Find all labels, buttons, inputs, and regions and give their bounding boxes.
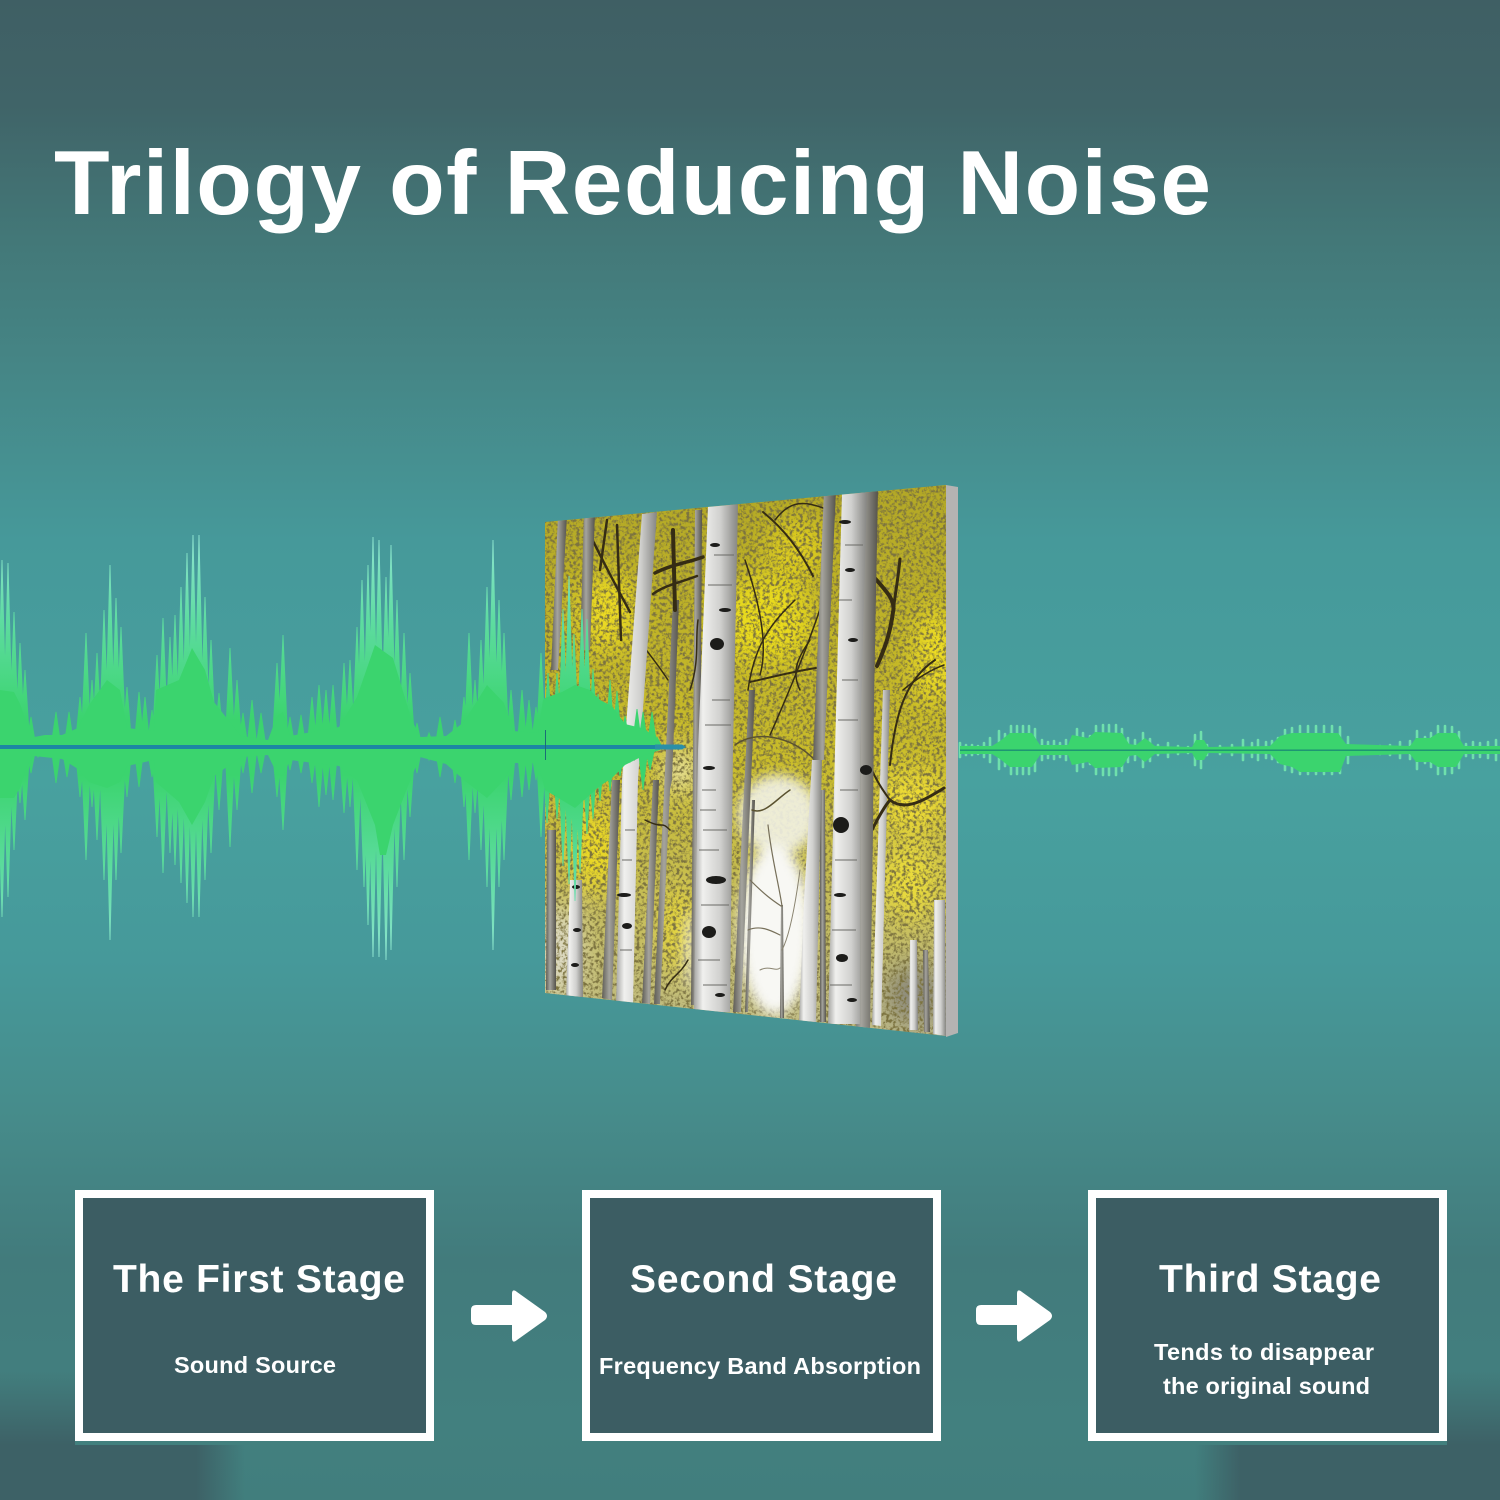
waveform spikes below centre — [0, 747, 655, 960]
heading: Second Stage — [630, 1258, 897, 1301]
arrow: second to third — [976, 1290, 1052, 1342]
heading: The First Stage — [113, 1258, 405, 1301]
panel: third stage — [1092, 1194, 1443, 1437]
heading: Third Stage — [1159, 1258, 1381, 1301]
attenuated ripple spikes — [960, 725, 1496, 775]
bark lines — [620, 545, 863, 985]
branches — [593, 503, 944, 990]
acoustic panel with birch forest picture — [542, 485, 958, 1037]
title: Trilogy of Reducing Noise — [54, 133, 1211, 234]
sound wave: source waveform passing into the panel — [0, 535, 686, 960]
subtext: the original sound — [1163, 1373, 1370, 1399]
bark marks — [571, 520, 872, 1002]
attenuated solid body — [960, 732, 1500, 772]
panel-edge hairline — [544, 730, 546, 760]
attenuated sound wave after the panel — [960, 725, 1500, 775]
far thin trunks — [546, 510, 930, 1032]
main trunks — [551, 490, 878, 1028]
arrow: first to second — [471, 1290, 547, 1342]
birch forest picture — [542, 485, 953, 1037]
attenuated centre line — [960, 750, 1500, 751]
panel side edge — [946, 485, 958, 1037]
waveform spikes above centre — [0, 535, 662, 747]
subtext — [1154, 1339, 1374, 1399]
box — [79, 1194, 430, 1437]
panel: first stage — [79, 1194, 430, 1437]
panel: second stage — [586, 1194, 937, 1437]
subtext: Sound Source — [174, 1352, 336, 1378]
subtext: Frequency Band Absorption — [599, 1353, 921, 1379]
waveform centre line tip — [655, 744, 686, 750]
subtext: Tends to disappear — [1154, 1339, 1374, 1365]
box — [586, 1194, 937, 1437]
box — [1092, 1194, 1443, 1437]
waveform solid body — [0, 645, 660, 855]
waveform centre line — [0, 745, 660, 749]
